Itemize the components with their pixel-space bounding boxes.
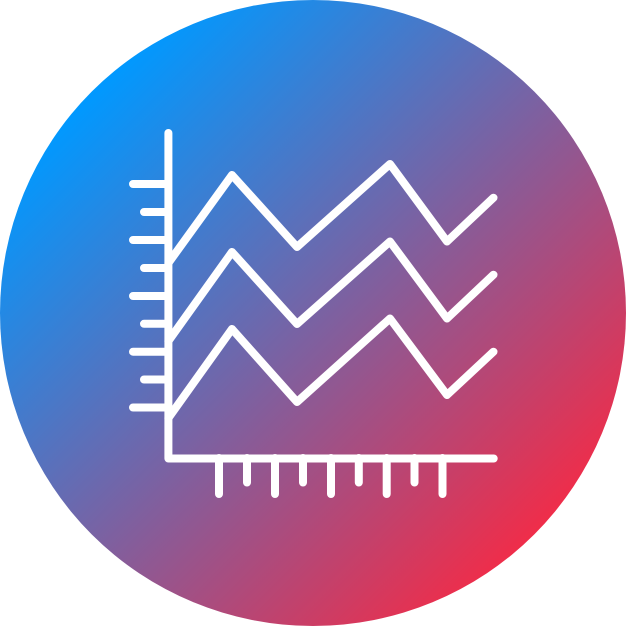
top line series <box>168 164 494 263</box>
middle line series <box>168 242 494 341</box>
bottom line series <box>168 318 494 418</box>
x axis ticks <box>219 458 442 494</box>
line chart drawing <box>133 133 494 494</box>
axes <box>168 133 494 458</box>
y axis ticks <box>133 184 168 408</box>
